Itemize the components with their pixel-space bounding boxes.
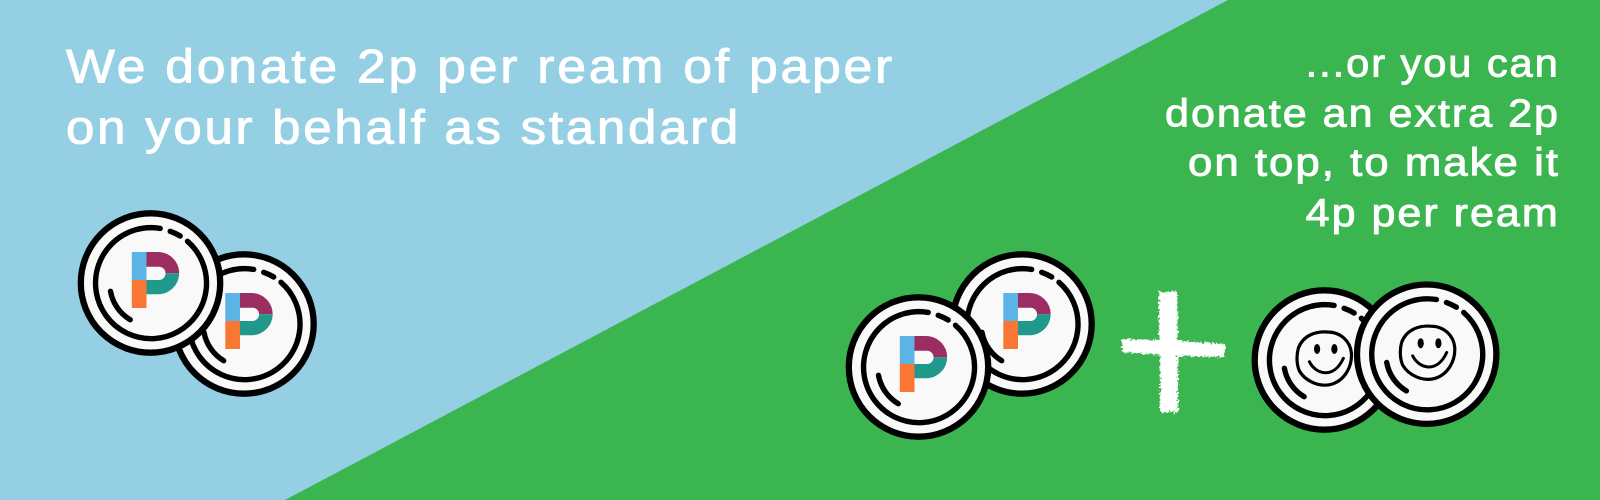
icon: chalk plus sign [1122,291,1225,412]
heading: optional extra donation: ...or you can [1306,43,1560,86]
icon: back coin with P logo, right pair [952,254,1092,394]
heading: standard donation: on your behalf as standard [66,100,741,153]
icon: front coin with smiley [1357,284,1496,424]
heading: optional extra donation: on top, to make it [1188,142,1560,184]
icon: back coin with smiley [1255,290,1394,430]
heading: standard donation [66,40,895,153]
icon: front coin with P logo, left pair [81,213,220,353]
heading: standard donation: We donate 2p per ream of paper [66,40,895,93]
heading: optional extra donation: 4p per ream [1306,192,1560,235]
icon: back coin with P logo, left pair [174,254,314,394]
heading: optional extra donation [1165,43,1560,235]
heading: optional extra donation: donate an extra 2p [1165,93,1560,136]
icon: front coin with P logo, right pair [849,297,988,437]
